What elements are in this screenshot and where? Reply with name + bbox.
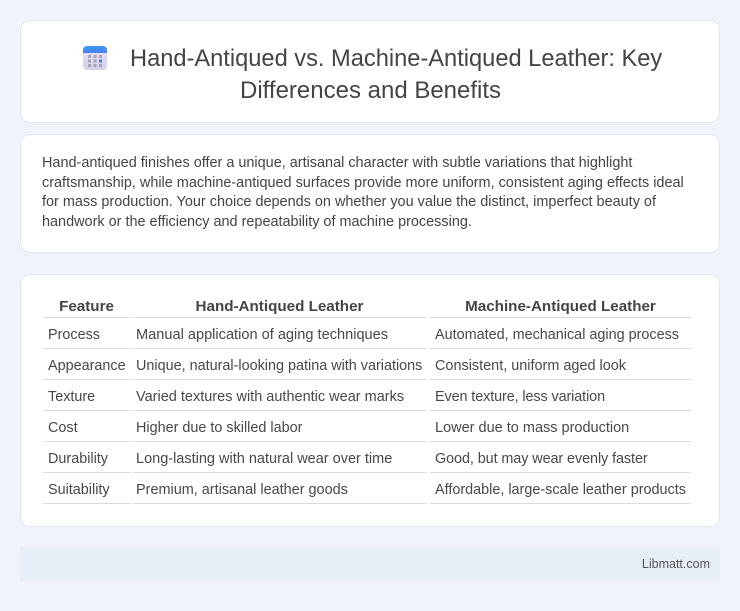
row: Durability: Good, but may wear evenly faster bbox=[435, 451, 648, 467]
row: Suitability: Premium, artisanal leather goods bbox=[136, 482, 348, 498]
row: Appearance: Appearance bbox=[48, 358, 126, 374]
icon: calendar bbox=[83, 46, 107, 70]
row: Texture bbox=[48, 389, 605, 405]
footer text: Libmatt.com bbox=[642, 557, 710, 571]
row: Durability bbox=[48, 451, 648, 467]
row: Texture: Varied textures with authentic wear marks bbox=[136, 389, 404, 405]
description text: craftsmanship, while machine-antiqued surfaces provide more uniform, consistent aging effects ideal bbox=[42, 174, 684, 190]
row: Appearance: Unique, natural-looking patina with variations bbox=[136, 358, 422, 374]
description text: Hand-antiqued finishes offer a unique, artisanal character with subtle variations that highlight bbox=[42, 155, 632, 171]
panel: description bbox=[20, 134, 720, 253]
row: Durability: Durability bbox=[48, 451, 108, 467]
row: Process bbox=[48, 327, 679, 343]
header: Feature: Feature bbox=[59, 298, 114, 315]
description text bbox=[42, 155, 684, 230]
row: Texture: Texture bbox=[48, 389, 95, 405]
row: Appearance bbox=[48, 358, 626, 374]
description text: handwork or the efficiency and repeatability of machine processing. bbox=[42, 214, 472, 230]
row: Suitability: Affordable, large-scale leather products bbox=[435, 482, 686, 498]
row: Process: Manual application of aging techniques bbox=[136, 327, 388, 343]
row: Cost bbox=[48, 420, 629, 436]
row: Texture: Even texture, less variation bbox=[435, 389, 605, 405]
row: Cost: Lower due to mass production bbox=[435, 420, 629, 436]
footer bar bbox=[20, 547, 720, 581]
row: Suitability: Suitability bbox=[48, 482, 110, 498]
row: Cost: Higher due to skilled labor bbox=[136, 420, 302, 436]
row: Cost: Cost bbox=[48, 420, 78, 436]
row: Durability: Long-lasting with natural wear over time bbox=[136, 451, 392, 467]
header: Hand-Antiqued Leather: Hand-Antiqued Leather bbox=[196, 298, 363, 315]
row: Process: Automated, mechanical aging process bbox=[435, 327, 679, 343]
title: Hand-Antiqued vs. Machine-Antiqued Leather: Key bbox=[130, 46, 662, 72]
panel: header bbox=[20, 20, 720, 123]
description text: for mass production. Your choice depends on whether you value the distinct, imperfect beauty of bbox=[42, 194, 656, 210]
row: Appearance: Consistent, uniform aged look bbox=[435, 358, 626, 374]
header: Machine-Antiqued Leather: Machine-Antiqued Leather bbox=[465, 298, 656, 315]
title bbox=[130, 46, 662, 104]
row: Suitability bbox=[48, 482, 686, 498]
title: Differences and Benefits bbox=[240, 77, 501, 104]
row: Process: Process bbox=[48, 327, 100, 343]
panel: comparison table bbox=[20, 274, 720, 527]
comparison table bbox=[43, 298, 691, 504]
